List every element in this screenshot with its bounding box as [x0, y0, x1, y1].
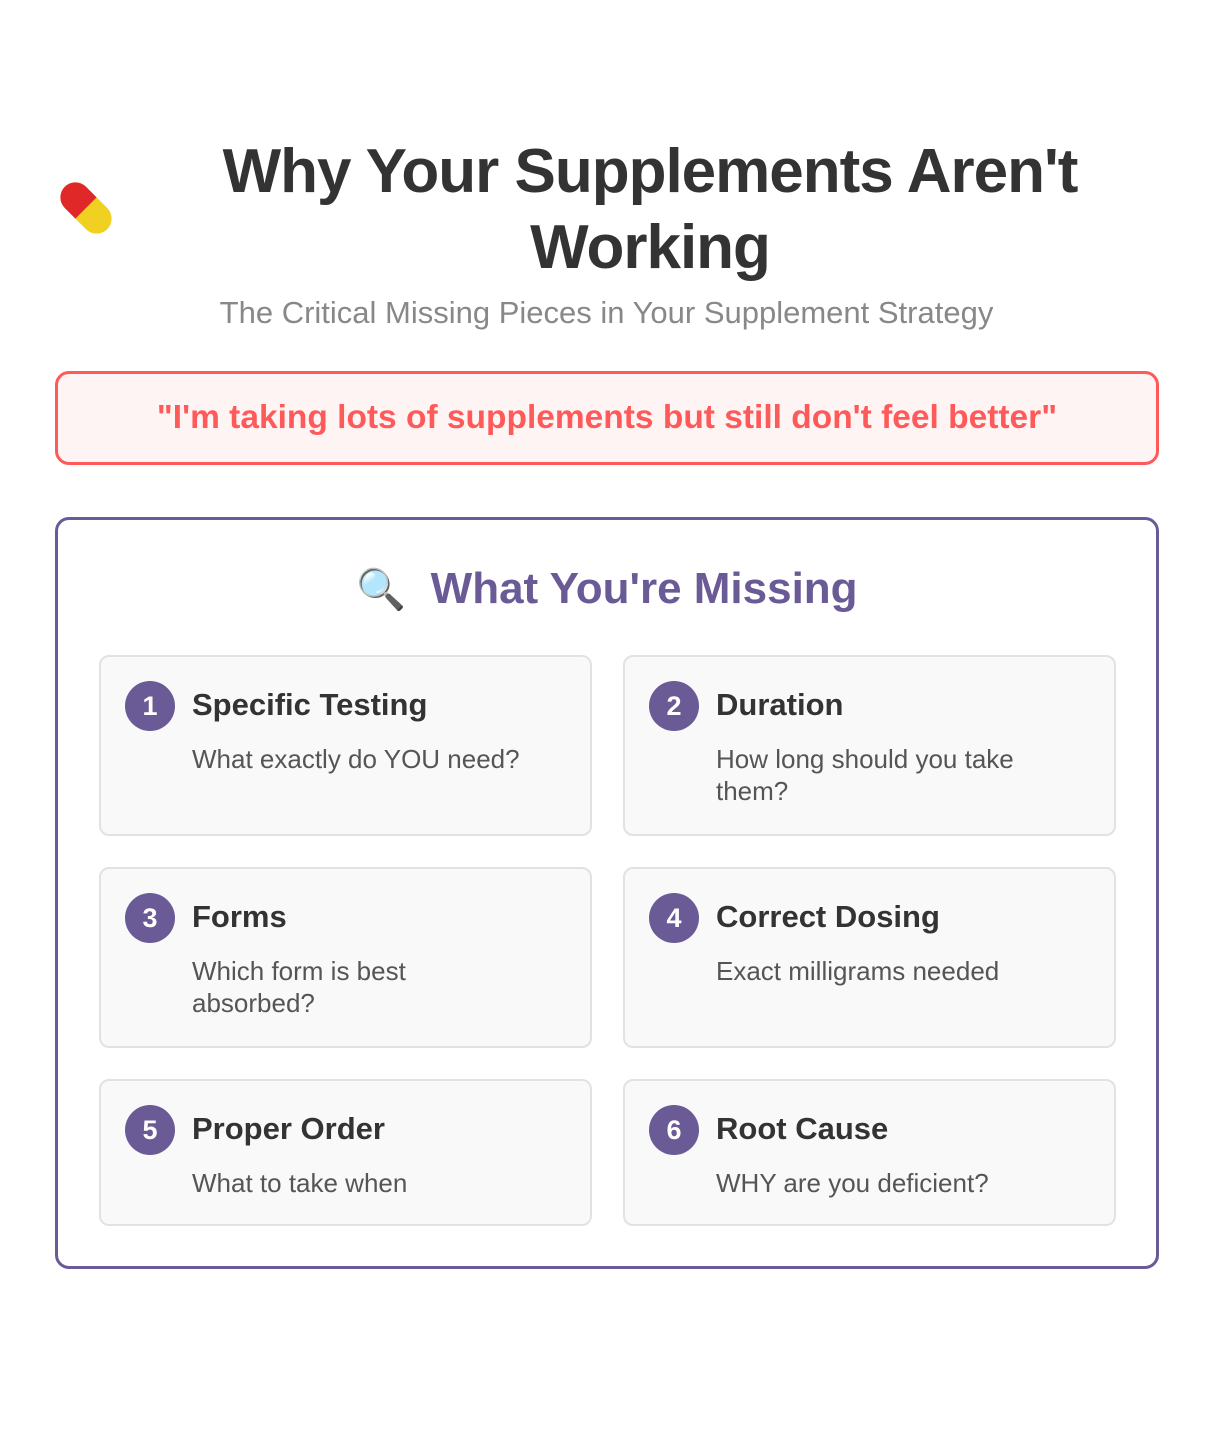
card 4: Exact milligrams needed	[716, 956, 999, 986]
card 3: 3	[142, 903, 158, 933]
card 1: 1	[142, 691, 158, 721]
title: Why Your Supplements Aren't	[223, 137, 1077, 206]
panel: what you're missing	[55, 517, 1159, 1269]
card 2: Duration	[716, 687, 843, 722]
card 4	[623, 867, 1116, 1048]
card 6: WHY are you deficient?	[716, 1168, 989, 1198]
card 6: 6	[666, 1115, 682, 1145]
card 4: 4	[666, 903, 682, 933]
card 1: Specific Testing	[192, 687, 427, 722]
card 1	[99, 655, 592, 836]
card 2: 2	[666, 691, 682, 721]
title: Working	[530, 213, 770, 282]
callout: quote: "I'm taking lots of supplements but still don't feel better"	[157, 399, 1057, 436]
card 3: Which form is best absorbed?	[192, 956, 406, 1018]
callout: quote	[55, 371, 1159, 465]
card 3: Forms	[192, 899, 287, 934]
icon: pill	[60, 182, 112, 234]
heading: 🔍 What You're Missing	[356, 564, 858, 613]
card 4: Correct Dosing	[716, 899, 940, 934]
card 1: What exactly do YOU need?	[192, 744, 520, 774]
subtitle: The Critical Missing Pieces in Your Supplement Strategy	[220, 295, 993, 330]
card 6: Root Cause	[716, 1111, 888, 1146]
card 5: What to take when	[192, 1168, 407, 1198]
card 5	[99, 1079, 592, 1226]
card 5: 5	[142, 1115, 158, 1145]
card 2: How long should you take them?	[716, 744, 1014, 806]
card 3	[99, 867, 592, 1048]
title	[222, 137, 1078, 282]
card 2	[623, 655, 1116, 836]
card 5: Proper Order	[192, 1111, 385, 1146]
card 6	[623, 1079, 1116, 1226]
